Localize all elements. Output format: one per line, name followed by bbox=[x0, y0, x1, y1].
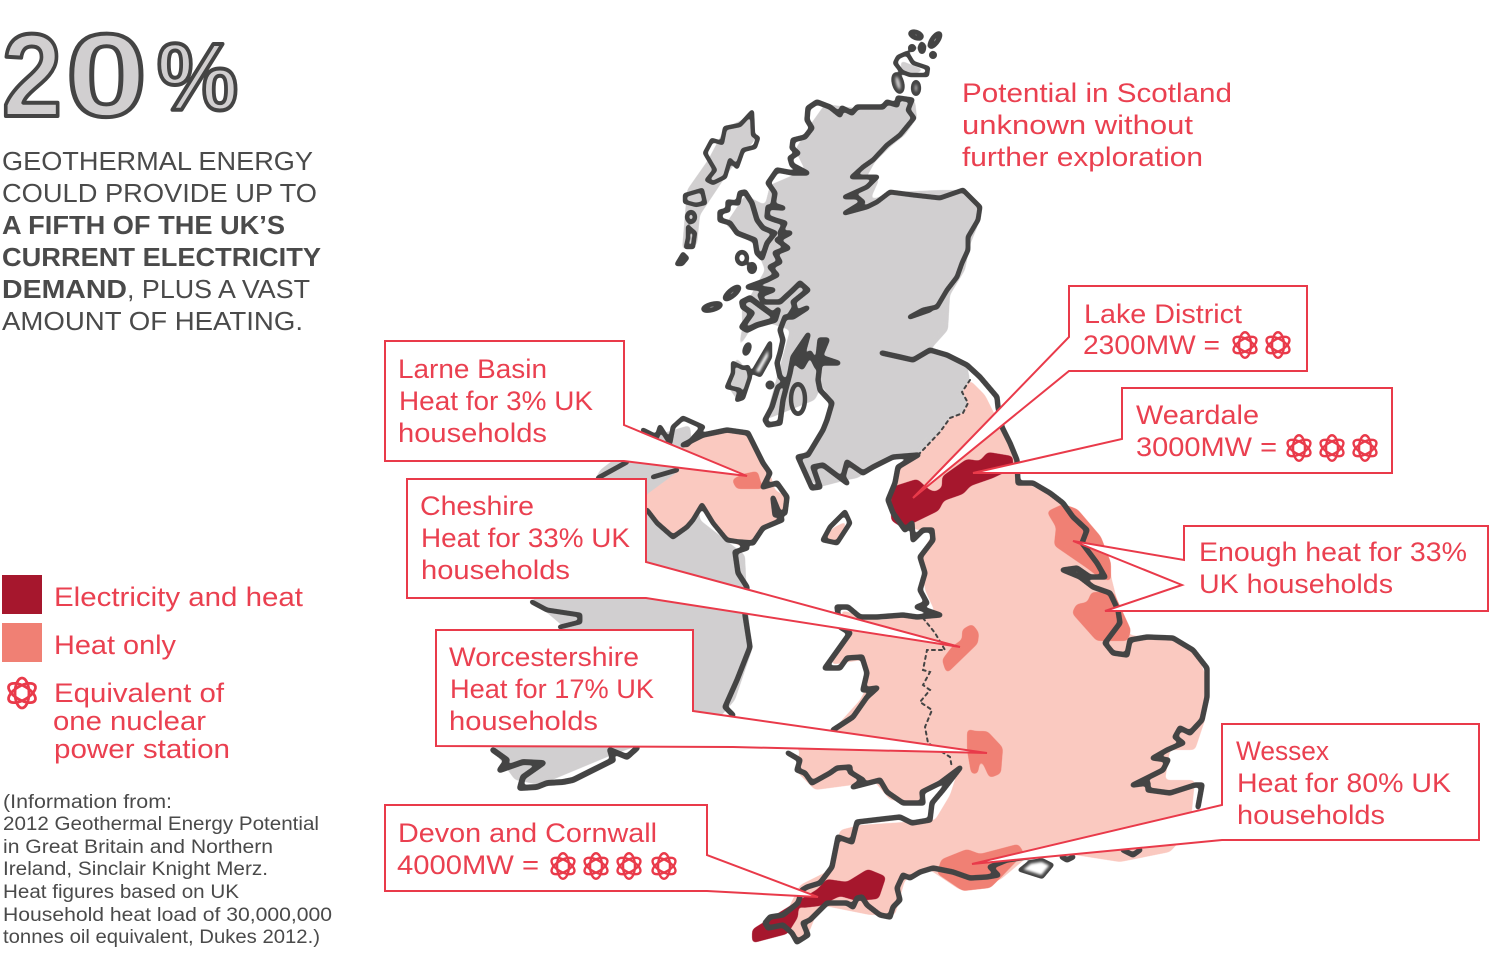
headline figure: 20%: 0 bbox=[66, 10, 147, 142]
zone: Devon bbox=[798, 870, 885, 907]
callout: Weardale: Weardale bbox=[1136, 400, 1259, 430]
zone: Wessex bbox=[938, 845, 1023, 890]
legend labels: power station bbox=[54, 734, 230, 764]
callout: Larne Basin bbox=[385, 341, 747, 476]
south coast of England bbox=[765, 753, 1140, 942]
legend bbox=[2, 575, 304, 764]
source note bbox=[3, 792, 332, 948]
callout: Devon and Cornwall: 4000MW = bbox=[397, 850, 539, 880]
note: Scotland potential: unknown without bbox=[962, 110, 1194, 140]
legend labels: Electricity and heat bbox=[54, 582, 304, 612]
callout: Worcestershire: Heat for 17% UK bbox=[450, 674, 654, 704]
intro text block: CURRENT ELECTRICITY bbox=[2, 242, 321, 272]
headline figure: 20%: 2 bbox=[2, 10, 62, 142]
callout: east coast heat bbox=[1073, 526, 1488, 611]
callout: Wessex: Heat for 80% UK bbox=[1237, 768, 1451, 798]
callout: Lake District bbox=[913, 286, 1307, 498]
callout: Cheshire: Heat for 33% UK bbox=[421, 523, 630, 553]
legend icon: atom bbox=[6, 678, 38, 708]
Outer Hebrides bbox=[677, 112, 758, 264]
source note: 2012 Geothermal Energy Potential bbox=[3, 814, 319, 835]
callout: Cheshire: Cheshire bbox=[420, 491, 534, 521]
callout: Devon and Cornwall bbox=[385, 805, 818, 897]
callout: Wessex: households bbox=[1237, 800, 1385, 830]
callout: Worcestershire: Worcestershire bbox=[449, 642, 639, 672]
callout: Cheshire: households bbox=[421, 555, 570, 585]
callout: Wessex: Wessex bbox=[1236, 736, 1329, 766]
callout: Larne Basin: households bbox=[398, 418, 547, 448]
Scotland and Ireland: unknown potential (grey) bbox=[493, 60, 980, 785]
zone: Lincolnshire coast bbox=[1073, 593, 1130, 640]
callout: Worcestershire: households bbox=[449, 706, 598, 736]
note: Scotland potential bbox=[962, 78, 1232, 172]
headline figure: 20%: % bbox=[157, 24, 238, 131]
callout: Wessex bbox=[972, 724, 1479, 864]
legend labels bbox=[53, 582, 304, 764]
electricity and heat zones bbox=[753, 453, 1012, 942]
intro text block: DEMAND bbox=[2, 274, 127, 304]
Isle of Man bbox=[823, 512, 850, 543]
source note: Ireland, Sinclair Knight Merz. bbox=[3, 859, 268, 880]
zone: Lake District and Weardale bbox=[892, 453, 1012, 527]
legend labels: Heat only bbox=[54, 630, 177, 660]
legend labels: one nuclear bbox=[53, 706, 206, 736]
callout: Cheshire bbox=[407, 479, 960, 647]
headline figure: 20% bbox=[2, 10, 238, 142]
Scottish islands bbox=[677, 30, 942, 414]
intro text block bbox=[2, 146, 321, 336]
east coast of Britain bbox=[882, 350, 1207, 807]
legend swatch: heat only bbox=[2, 623, 42, 662]
callout: Weardale bbox=[973, 388, 1392, 473]
Isle of Wight bbox=[1020, 860, 1052, 877]
callout: Devon and Cornwall: Devon and Cornwall bbox=[398, 818, 657, 848]
Skye and Inner Hebrides bbox=[703, 192, 805, 414]
intro text block: A FIFTH OF THE UK’S bbox=[2, 210, 285, 240]
heat-only zones bbox=[733, 472, 1130, 890]
source note: Household heat load of 30,000,000 bbox=[3, 905, 332, 926]
callout: Larne Basin: Larne Basin bbox=[398, 354, 547, 384]
Orkney and Shetland bbox=[892, 30, 942, 94]
source note: in Great Britain and Northern bbox=[3, 837, 273, 858]
legend swatch: electricity and heat bbox=[2, 575, 42, 614]
callout: Lake District: Lake District bbox=[1084, 299, 1243, 329]
source note: tonnes oil equivalent, Dukes 2012.) bbox=[3, 927, 320, 948]
intro text block: , PLUS A VAST bbox=[127, 274, 310, 304]
zone: Cornwall bbox=[753, 902, 798, 942]
callout: east coast heat: Enough heat for 33% bbox=[1199, 537, 1467, 567]
source note: (Information from: bbox=[3, 792, 172, 813]
zone: Larne Basin bbox=[733, 472, 763, 488]
coastlines bbox=[493, 98, 1207, 942]
intro text block: COULD PROVIDE UP TO bbox=[2, 178, 317, 208]
zone: Cheshire bbox=[943, 625, 978, 672]
zone: north-east coast bbox=[1048, 505, 1110, 580]
legend labels: Equivalent of bbox=[54, 678, 225, 708]
callout: Weardale: 3000MW = bbox=[1136, 432, 1277, 462]
callout: Worcestershire bbox=[436, 630, 987, 753]
note: Scotland potential: further exploration bbox=[962, 142, 1203, 172]
Scottish coast: east bbox=[845, 100, 980, 317]
note: Scotland potential: Potential in Scotland bbox=[962, 78, 1232, 108]
zone: Worcestershire bbox=[968, 730, 1002, 777]
map of the UK and Ireland bbox=[493, 30, 1208, 942]
Scottish coast: north and west bbox=[748, 98, 918, 488]
callout: Larne Basin: Heat for 3% UK bbox=[399, 386, 593, 416]
England, Wales and Northern Ireland: heat potential (pink) bbox=[645, 380, 1208, 942]
source note: Heat figures based on UK bbox=[3, 882, 239, 903]
Wales and north-west England coast bbox=[825, 455, 940, 730]
intro text block: GEOTHERMAL ENERGY bbox=[2, 146, 313, 176]
coast of Ireland bbox=[683, 430, 787, 715]
callout: Lake District: 2300MW = bbox=[1083, 330, 1220, 360]
callout: east coast heat: UK households bbox=[1199, 569, 1393, 599]
national borders (dotted) bbox=[918, 380, 970, 768]
intro text block: AMOUNT OF HEATING. bbox=[2, 306, 303, 336]
